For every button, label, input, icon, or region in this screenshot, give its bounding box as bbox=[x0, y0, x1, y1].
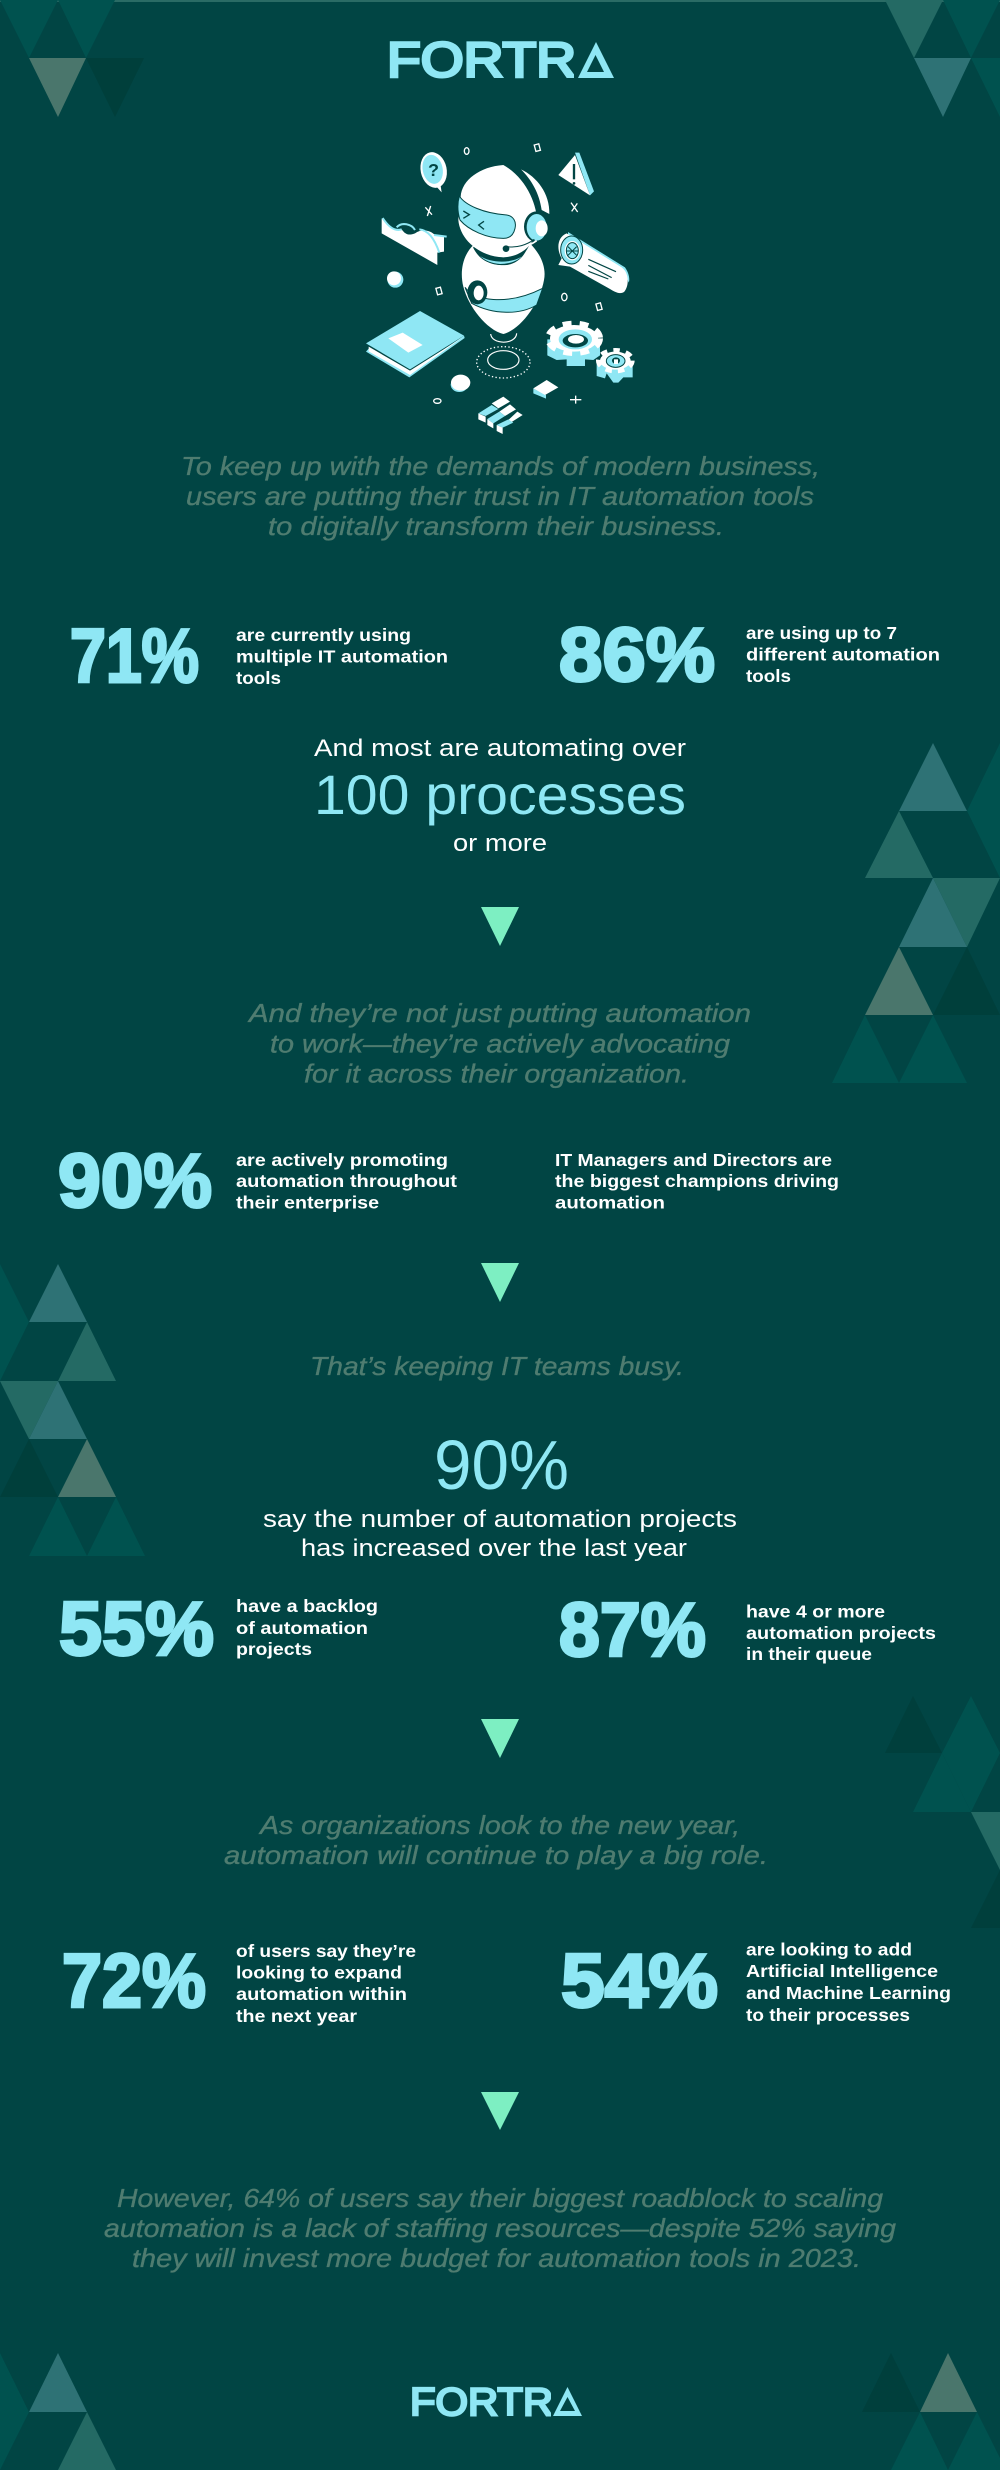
stat: 72%: the next year bbox=[236, 2006, 357, 2026]
icon: question bubble: ? bbox=[428, 160, 439, 180]
text block: IT managers: IT Managers and Directors are bbox=[555, 1150, 832, 1170]
text block: new year: automation will continue to play a big role. bbox=[224, 1840, 768, 1870]
text block: closing: automation is a lack of staffing resources—despite 52% saying bbox=[104, 2213, 897, 2243]
callout: 100 processes bbox=[314, 735, 686, 857]
decorative triangles: left cluster bbox=[0, 1264, 145, 1556]
icon: hover rings bbox=[477, 333, 530, 378]
stat: 54%: and Machine Learning bbox=[746, 1983, 951, 2003]
stat: 72%: 72% bbox=[62, 1939, 206, 2024]
text block: intro bbox=[181, 451, 820, 541]
stat: 71%: tools bbox=[236, 668, 281, 688]
stat: 86%: are using up to 7 bbox=[746, 623, 897, 643]
text block: closing bbox=[104, 2183, 897, 2273]
stat: 55%: have a backlog bbox=[236, 1596, 378, 1616]
illustration: robot with floating icons bbox=[366, 144, 633, 434]
stat: 55% bbox=[59, 1587, 378, 1672]
icon: chat bubble bbox=[558, 232, 629, 293]
stat: 86% bbox=[559, 613, 940, 698]
icon: warning triangle bbox=[558, 153, 594, 195]
arrow 4 bbox=[481, 2092, 519, 2130]
icon: sparkles and small marks bbox=[425, 144, 602, 404]
text block: intro: to digitally transform their business. bbox=[268, 511, 724, 541]
icon: small gear bbox=[597, 351, 633, 383]
stat: 55%: 55% bbox=[59, 1587, 214, 1672]
arrow 1 bbox=[481, 907, 519, 946]
logo: Fortra header: FORTRA bbox=[387, 34, 613, 88]
text block: closing: they will invest more budget for automation tools in 2023. bbox=[132, 2243, 861, 2273]
stat: 71%: 71% bbox=[70, 614, 199, 699]
callout: 100 processes: And most are automating over bbox=[314, 735, 686, 762]
text block: new year: As organizations look to the new year, bbox=[258, 1810, 740, 1840]
stat: 86%: different automation bbox=[746, 644, 940, 664]
stat: 86%: tools bbox=[746, 666, 791, 686]
text block: closing: However, 64% of users say their biggest roadblock to scaling bbox=[117, 2183, 884, 2213]
callout: 90% projects increased: say the number of automation projects bbox=[263, 1506, 737, 1533]
text block: intro: To keep up with the demands of modern business, bbox=[181, 451, 820, 481]
icon: robot bbox=[458, 165, 549, 334]
stat: 54%: are looking to add bbox=[746, 1940, 912, 1960]
decorative triangles: bottom left bbox=[0, 2353, 116, 2470]
stat: 87%: have 4 or more bbox=[746, 1602, 885, 1622]
icon: small diamond block bbox=[533, 380, 558, 399]
icon: large gear bbox=[547, 324, 600, 366]
stat: 54%: 54% bbox=[561, 1939, 718, 2024]
icon: stacked blocks bbox=[478, 397, 523, 434]
icon: small sphere bbox=[387, 271, 403, 288]
decorative triangles: right middle cluster bbox=[885, 1696, 1000, 1928]
stat: 72%: of users say they’re bbox=[236, 1941, 416, 1961]
decorative triangles: top left bbox=[0, 0, 144, 117]
stat: 72% bbox=[62, 1939, 416, 2026]
icon: question bubble bbox=[417, 150, 450, 192]
callout: 100 processes: or more bbox=[453, 830, 547, 857]
icon: folded hand shape bbox=[382, 218, 447, 265]
icon: pebble bbox=[451, 375, 470, 392]
icon: book bbox=[366, 311, 465, 377]
callout: 90% projects increased bbox=[263, 1426, 737, 1562]
text block: advocating: for it across their organization. bbox=[304, 1058, 689, 1088]
stat: 87%: 87% bbox=[559, 1588, 706, 1673]
stat: 87%: automation projects bbox=[746, 1623, 936, 1643]
stat: 55%: of automation bbox=[236, 1618, 368, 1638]
stat: 72%: automation within bbox=[236, 1984, 407, 2004]
stat: 90% promoting: are actively promoting bbox=[236, 1150, 448, 1170]
stat: 87% bbox=[559, 1588, 936, 1673]
stat: 90% promoting: automation throughout bbox=[236, 1171, 457, 1191]
stat: 90% promoting bbox=[58, 1139, 457, 1224]
stat: 71%: multiple IT automation bbox=[236, 646, 448, 666]
callout: 100 processes: 100 processes bbox=[314, 763, 686, 826]
stat: 86%: 86% bbox=[559, 613, 715, 698]
stat: 71%: are currently using bbox=[236, 625, 411, 645]
stat: 55%: projects bbox=[236, 1639, 312, 1659]
text block: advocating bbox=[247, 998, 751, 1088]
stat: 54% bbox=[561, 1939, 951, 2025]
stat: 90% promoting: 90% bbox=[58, 1139, 212, 1224]
text block: IT managers: the biggest champions driving bbox=[555, 1171, 839, 1191]
text block: advocating: to work—they’re actively advocating bbox=[270, 1028, 731, 1058]
text block: intro: users are putting their trust in IT automation tools bbox=[186, 481, 814, 511]
arrow 2 bbox=[481, 1263, 519, 1302]
text block: advocating: And they’re not just putting automation bbox=[247, 998, 751, 1028]
stat: 71% bbox=[70, 614, 448, 699]
stat: 54%: Artificial Intelligence bbox=[746, 1961, 938, 1981]
decorative triangles: bottom right bbox=[862, 2353, 1000, 2470]
text block: IT managers bbox=[555, 1150, 839, 1212]
text block: new year bbox=[224, 1810, 768, 1870]
decorative triangles: top right bbox=[885, 0, 1000, 117]
stat: 90% promoting: their enterprise bbox=[236, 1192, 379, 1212]
decorative triangles: right cluster bbox=[832, 743, 1000, 1083]
stat: 87%: in their queue bbox=[746, 1644, 872, 1664]
stat: 72%: looking to expand bbox=[236, 1962, 402, 1982]
stat: 54%: to their processes bbox=[746, 2005, 910, 2025]
logo: Fortra footer: FORTRA bbox=[410, 2381, 581, 2424]
callout: 90% projects increased: has increased over the last year bbox=[301, 1535, 687, 1562]
callout: 90% projects increased: 90% bbox=[434, 1426, 569, 1504]
text block: IT managers: automation bbox=[555, 1192, 665, 1212]
text block: keeping teams busy: That’s keeping IT teams busy. bbox=[310, 1351, 684, 1381]
arrow 3 bbox=[481, 1719, 519, 1758]
